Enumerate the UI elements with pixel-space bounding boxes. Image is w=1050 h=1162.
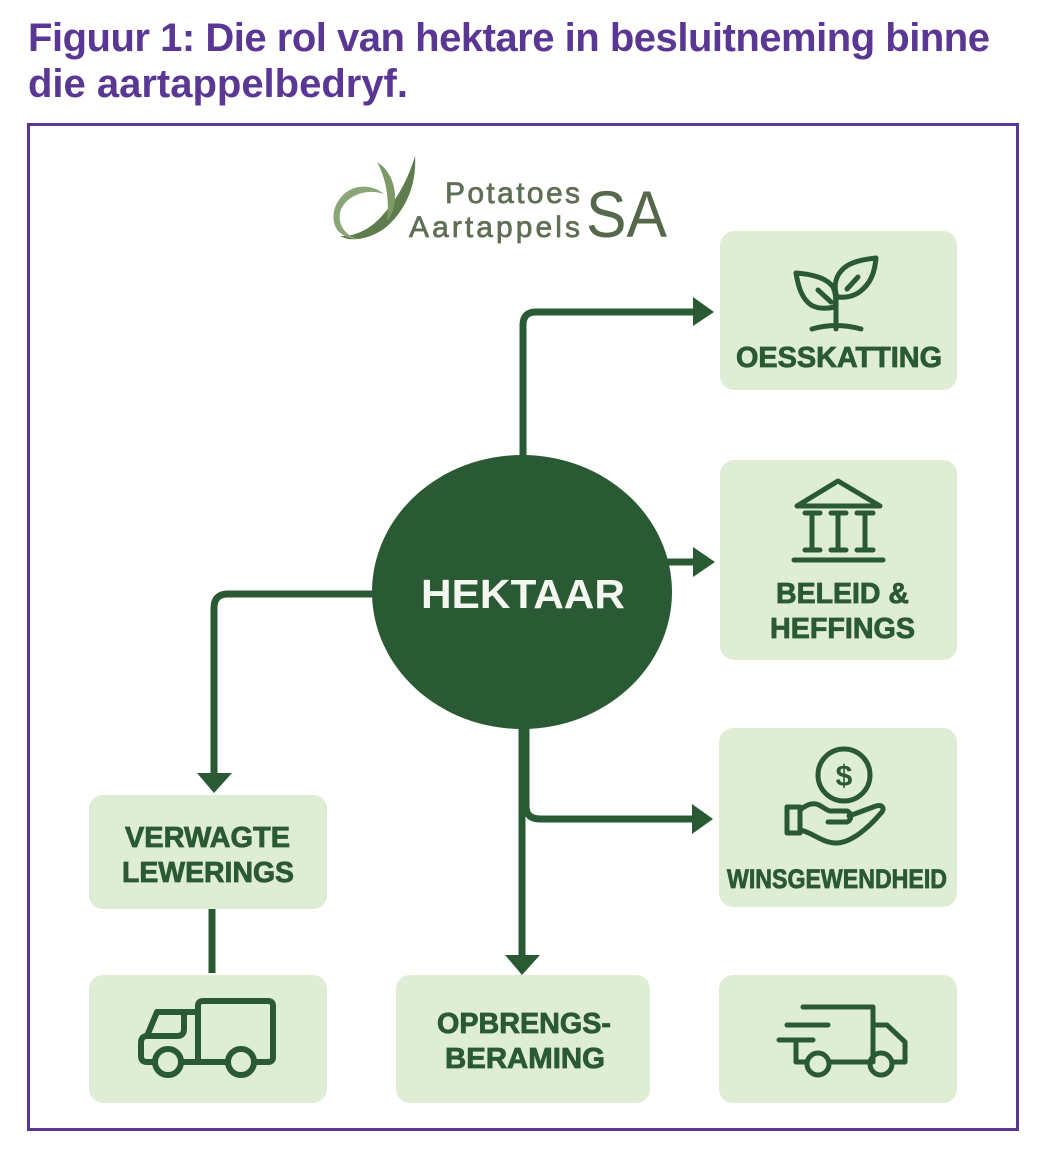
panel: oesskatting [720,231,957,390]
panel: opbrengsberaming: OPBRENGS- [437,1008,611,1040]
icon: seedling [796,258,876,329]
central circle: hektaar: HEKTAAR [421,571,625,617]
panel: beleid en heffings [720,460,957,660]
panel: winsgewendheid: WINSGEWENDHEID [727,864,947,894]
panel: beleid en heffings: BELEID & [776,578,909,610]
arrow: hektaar to beleid [665,547,715,577]
panel: beleid en heffings: HEFFINGS [770,613,915,645]
panel: verwagte lewerings: LEWERINGS [122,857,294,889]
icon text: dollar sign: $ [836,760,853,793]
arrow: hektaar to oesskatting [523,297,714,460]
icon: government building [794,481,883,560]
logo: Potatoes Aartappels SA: Aartappels [409,211,580,244]
title: die aartappelbedryf. [28,62,408,106]
logo: Potatoes Aartappels SA [333,156,667,251]
title: Figuur 1: Die rol van hektare in besluitneming binne [28,16,990,60]
arrow: hektaar to verwagte lewerings [197,594,378,793]
central circle: hektaar [372,455,672,729]
panel: opbrengsberaming [396,975,650,1103]
panel: truck [89,975,327,1103]
arrow: hektaar to opbrengsberaming [505,725,540,975]
arrow: hektaar to winsgewendheid [526,725,713,834]
icon: fast delivery truck [779,1007,905,1075]
icon: hand with coin [787,749,883,843]
panel: opbrengsberaming: BERAMING [445,1043,605,1075]
logo: Potatoes Aartappels SA: SA [586,177,667,251]
panel: verwagte lewerings: VERWAGTE [125,822,290,854]
connector: verwagte lewerings to truck [208,908,216,973]
panel: oesskatting: OESSKATTING [736,342,942,374]
title [28,16,990,106]
panel: moving truck [719,975,957,1103]
panel: winsgewendheid [719,728,957,907]
icon: delivery truck [141,1001,273,1075]
panel: verwagte lewerings [89,795,327,909]
logo: Potatoes Aartappels SA: Potatoes [445,177,580,210]
